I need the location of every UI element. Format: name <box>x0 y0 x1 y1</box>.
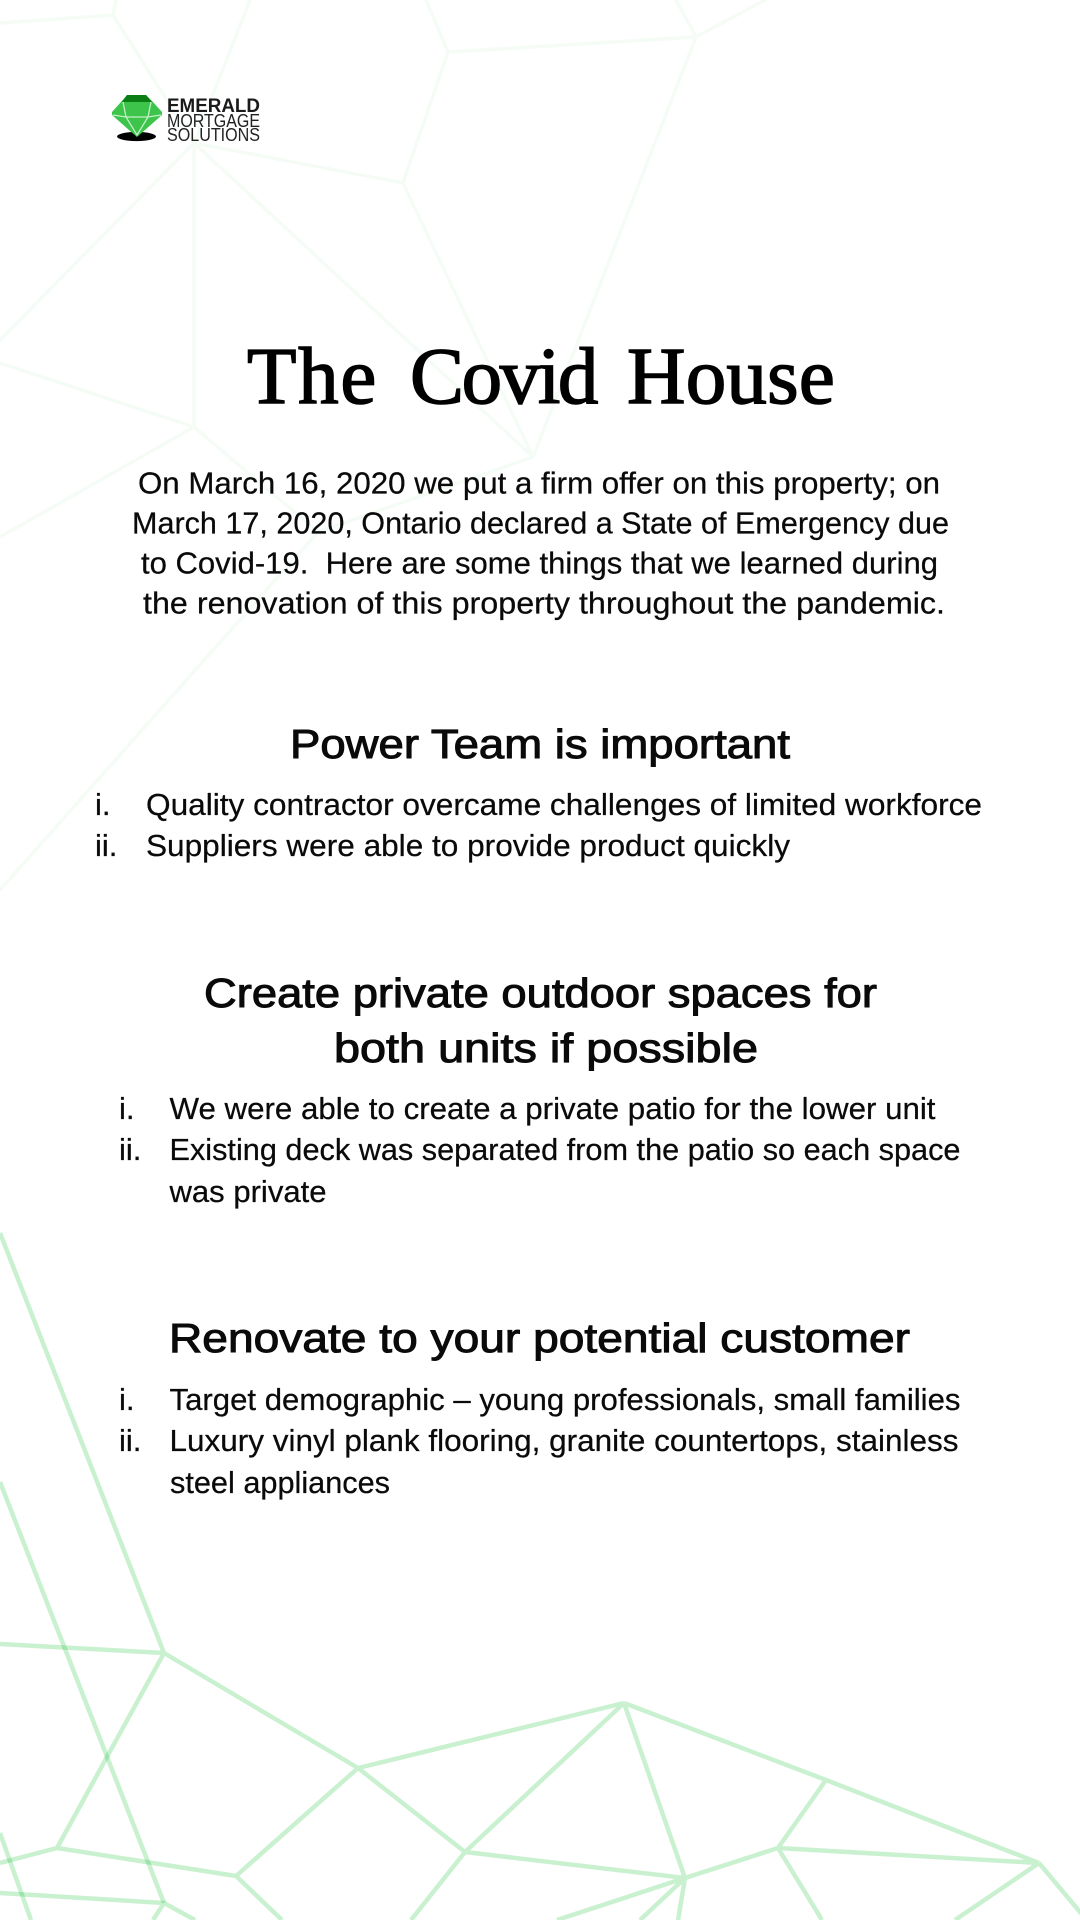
title: The <box>247 331 400 421</box>
title <box>247 331 835 421</box>
list: Power Team items: i. <box>95 787 110 822</box>
heading: Create private outdoor spaces: Create private outdoor spaces for <box>204 970 877 1016</box>
list: Power Team items: Quality contractor overcame challenges of limited workforce <box>146 787 982 822</box>
intro text block: the renovation of this property throughout the pandemic. <box>143 586 945 620</box>
title: Covid <box>410 331 614 421</box>
list: outdoor space items: ii. <box>119 1132 141 1167</box>
intro text block <box>132 466 949 620</box>
list: Power Team items: ii. <box>95 828 117 863</box>
logo wordmark <box>167 95 260 145</box>
list: outdoor space items <box>119 1091 960 1209</box>
list: outdoor space items: Existing deck was separated from the patio so each space <box>170 1132 960 1167</box>
list: Power Team items: Suppliers were able to provide product quickly <box>146 828 790 863</box>
list: outdoor space items: was private <box>168 1174 326 1209</box>
title: House <box>627 331 835 421</box>
logo wordmark: SOLUTIONS <box>167 124 260 145</box>
section 2: private outdoor spaces <box>119 970 960 1209</box>
heading: Create private outdoor spaces: both units if possible <box>334 1025 758 1071</box>
heading: Create private outdoor spaces <box>204 970 877 1071</box>
list: outdoor space items: We were able to create a private patio for the lower unit <box>170 1091 936 1126</box>
heading: Power Team is important: Power Team is important <box>290 721 790 767</box>
logo wordmark: EMERALD <box>167 95 260 117</box>
section 1: Power Team <box>95 721 982 863</box>
list: renovation items: i. <box>119 1382 134 1417</box>
intro text block: On March 16, 2020 we put a firm offer on this property; on <box>138 466 940 500</box>
list: renovation items: Luxury vinyl plank flooring, granite countertops, stainless <box>170 1423 958 1458</box>
list: renovation items: ii. <box>119 1423 141 1458</box>
logo wordmark: MORTGAGE <box>167 110 260 131</box>
icon: emerald gem <box>112 95 162 141</box>
intro text block: March 17, 2020, Ontario declared a State of Emergency due <box>132 506 949 540</box>
list: renovation items: steel appliances <box>170 1465 390 1500</box>
list: Power Team items <box>95 787 982 863</box>
list: outdoor space items: i. <box>119 1091 134 1126</box>
section 3: Renovate to your potential customer <box>119 1315 960 1500</box>
heading: Renovate to your potential customer: Renovate to your potential customer <box>169 1315 910 1361</box>
list: renovation items <box>119 1382 960 1500</box>
intro text block: to Covid-19. Here are some things that we learned during <box>141 546 938 580</box>
list: renovation items: Target demographic – young professionals, small families <box>170 1382 960 1417</box>
